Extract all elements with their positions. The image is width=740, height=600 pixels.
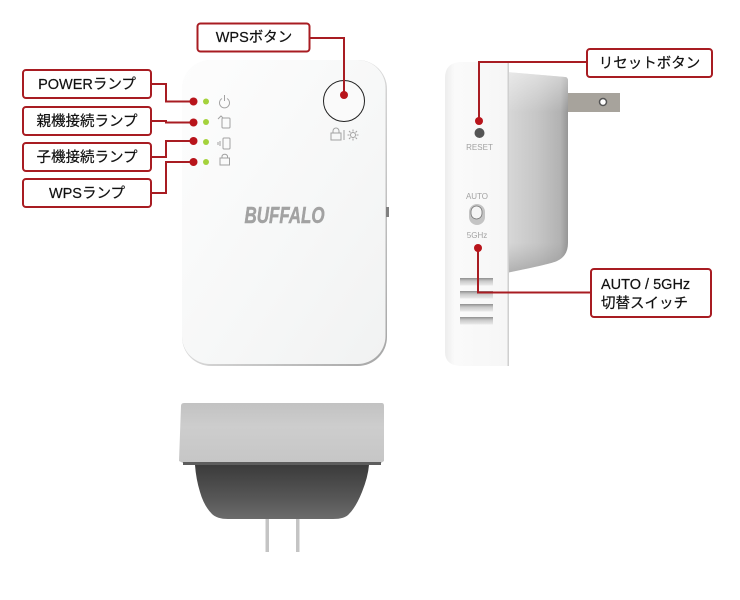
reset label: RESET [466, 143, 493, 152]
callout: AUTO / 5GHz switch: AUTO / 5GHz [601, 277, 690, 293]
logo: BUFFALO: BUFFALO [244, 202, 325, 228]
device: side view [445, 62, 620, 366]
callout: parent connection lamp [23, 107, 198, 135]
side body [445, 62, 508, 366]
callout: AUTO / 5GHz switch: 切替スイッチ [601, 295, 688, 312]
slide switch [469, 204, 485, 225]
device: bottom view [179, 403, 384, 552]
callout: child connection lamp [23, 137, 198, 171]
icon: WPS button ring [324, 80, 364, 122]
callout: AUTO / 5GHz switch [474, 244, 711, 317]
device: front view [182, 60, 389, 366]
dark housing [195, 465, 369, 519]
auto label: AUTO [466, 192, 488, 201]
callout: WPS lamp [23, 158, 198, 207]
top plate [179, 403, 384, 463]
green LED lamps [203, 98, 209, 165]
icon: lock [220, 154, 230, 165]
5GHz label: 5GHz [467, 231, 487, 240]
callout: reset button [475, 49, 712, 125]
callout: POWER lamp: POWERランプ [38, 76, 136, 93]
prongs [266, 516, 300, 552]
callout: parent connection lamp: 親機接続ランプ [36, 113, 138, 130]
reset hole [474, 128, 484, 138]
icon: child device [218, 138, 230, 149]
vents [460, 278, 493, 324]
callout: WPS button: WPSボタン [216, 29, 292, 46]
callout: POWER lamp [23, 70, 198, 106]
callout: child connection lamp: 子機接続ランプ [36, 149, 138, 166]
plug housing [506, 72, 568, 273]
callout: WPS lamp: WPSランプ [49, 185, 126, 202]
callout: WPS button [198, 24, 348, 99]
icon: power [220, 95, 230, 108]
plug prong [566, 93, 620, 112]
icon: lock and brightness mark [331, 128, 358, 140]
callout: reset button: リセットボタン [599, 55, 700, 72]
icon: parent device [218, 116, 230, 128]
